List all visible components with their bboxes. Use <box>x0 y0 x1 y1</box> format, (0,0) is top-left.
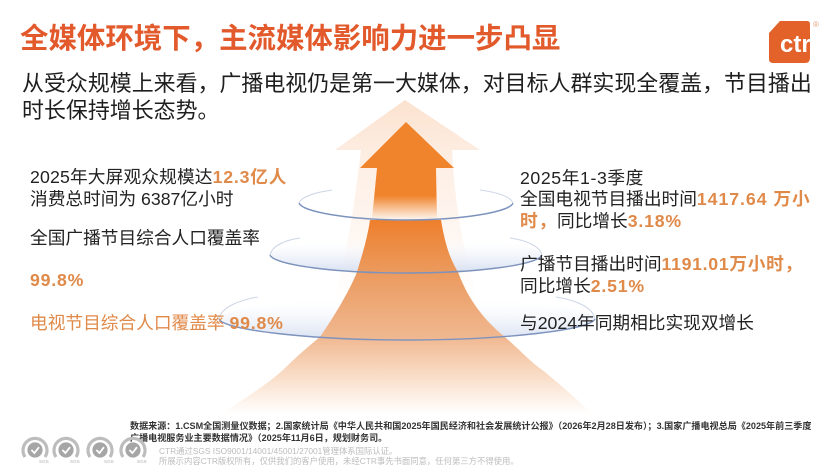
right text: double growth: 与2024年同期相比实现双增长 <box>520 313 754 333</box>
ring: middle <box>270 238 542 272</box>
data source note: 广播电视服务业主要数据情况》（2025年11月6日，规划财务司。 <box>130 432 387 442</box>
ring line: bottom <box>219 297 595 340</box>
logo: ctr <box>769 20 819 63</box>
data source note <box>130 420 812 442</box>
left text: audience scale <box>30 167 287 208</box>
ring: top <box>299 190 513 220</box>
subtitle text: 从受众规模上来看，广播电视仍是第一大媒体，对目标人群实现全覆盖，节目播出 <box>22 71 812 96</box>
icons: SGS certification badges: SGS <box>70 459 80 464</box>
right text: radio airtime <box>520 254 803 296</box>
pale back arrow <box>335 100 480 300</box>
right text: TV airtime: 全国电视节目播出时间1417.64 万小 <box>520 189 811 209</box>
left text: broadcast coverage value: 99.8% <box>30 270 84 290</box>
right text: TV airtime <box>520 168 811 230</box>
right text: TV airtime: 2025年1-3季度 <box>520 168 644 188</box>
left text: TV coverage: 电视节目综合人口覆盖率 99.8% <box>30 313 284 333</box>
copyright note: 所展示内容CTR版权所有，仅供我们的客户使用，未经CTR事先书面同意，任何第三方不得使用。 <box>159 456 519 466</box>
main arrow lower body <box>222 220 592 414</box>
subtitle text <box>22 71 812 123</box>
main arrow head <box>360 122 454 219</box>
icons: SGS certification badges: SGS <box>137 459 147 464</box>
left text: broadcast coverage label: 全国广播节目综合人口覆盖率 <box>30 228 260 248</box>
copyright note: CTR通过SGS ISO9001/14001/45001/27001管理体系国际认证。 <box>159 446 397 456</box>
right text: radio airtime: 同比增长2.51% <box>520 276 645 296</box>
ring: bottom <box>219 298 595 340</box>
left text: audience scale: 消费总时间为 6387亿小时 <box>30 188 233 208</box>
left text: audience scale: 2025年大屏观众规模达12.3亿人 <box>30 167 287 187</box>
title: 全媒体环境下，主流媒体影响力进一步凸显 <box>20 22 560 54</box>
icons: SGS certification badges: SGS <box>104 459 114 464</box>
right text: TV airtime: 时，同比增长3.18% <box>520 210 682 230</box>
copyright note <box>159 446 519 466</box>
right text: radio airtime: 广播节目播出时间1191.01万小时， <box>520 254 803 274</box>
ring line: middle <box>270 238 542 273</box>
icons: SGS certification badges <box>21 436 147 464</box>
data source note: 数据来源：1.CSM全国测量仪数据；2.国家统计局《中华人民共和国2025年国民经济和社会发展统计公报》（2026年2月28日发布）；3.国家广播电视总局《2025年前三季度 <box>130 420 811 430</box>
subtitle text: 时长保持增长态势。 <box>22 98 219 123</box>
icons: SGS certification badges: SGS <box>39 459 49 464</box>
logo: ctr: ® <box>813 20 819 29</box>
